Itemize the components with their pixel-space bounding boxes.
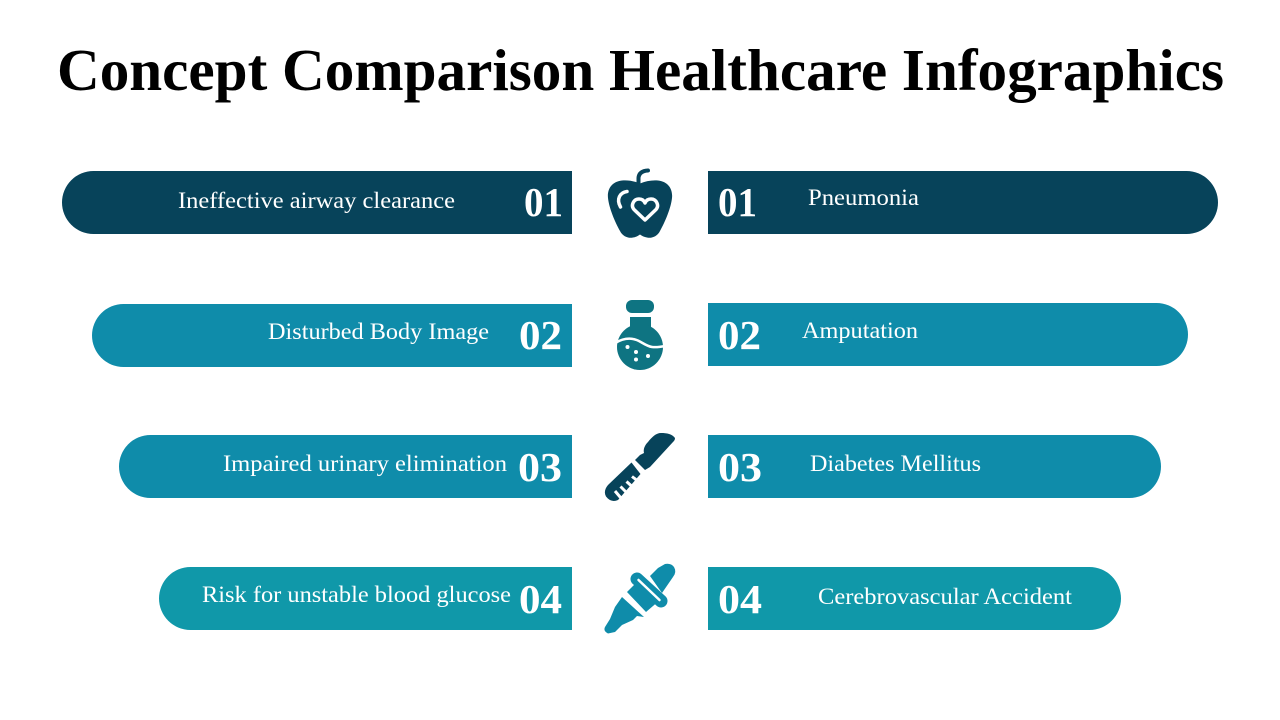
left bar 04: Risk for unstable blood glucose xyxy=(202,582,511,608)
title: Concept Comparison Healthcare Infographics xyxy=(57,37,1224,103)
right bar 03: Diabetes Mellitus xyxy=(810,451,981,477)
icon: dropper xyxy=(604,564,675,634)
left bar 03 xyxy=(119,435,572,498)
right bar 02: Amputation xyxy=(802,318,918,344)
icon: scalpel xyxy=(605,433,675,501)
left bar 01 xyxy=(62,171,572,234)
left bar 01: Ineffective airway clearance xyxy=(178,188,455,214)
right bar 04: 04 xyxy=(718,576,762,622)
icon: apple with heart xyxy=(608,170,672,238)
left bar 03: 03 xyxy=(518,444,562,490)
right bar 01 xyxy=(708,171,1218,234)
left bar 02: Disturbed Body Image xyxy=(268,319,489,345)
left bar 04 xyxy=(159,567,572,630)
right bar 04 xyxy=(708,567,1121,630)
right bar 02: 02 xyxy=(718,312,761,358)
left bar 02 xyxy=(92,304,572,367)
icon: flask xyxy=(615,300,665,370)
left bar 03: Impaired urinary elimination xyxy=(223,451,507,477)
right bar 01: 01 xyxy=(718,179,757,225)
left bar 04: 04 xyxy=(519,576,562,622)
left bar 02: 02 xyxy=(519,312,562,358)
left bar 01: 01 xyxy=(524,179,563,225)
right bar 01: Pneumonia xyxy=(808,185,920,211)
right bar 02 xyxy=(708,303,1188,366)
right bar 03: 03 xyxy=(718,444,762,490)
right bar 03 xyxy=(708,435,1161,498)
right bar 04: Cerebrovascular Accident xyxy=(818,584,1072,610)
